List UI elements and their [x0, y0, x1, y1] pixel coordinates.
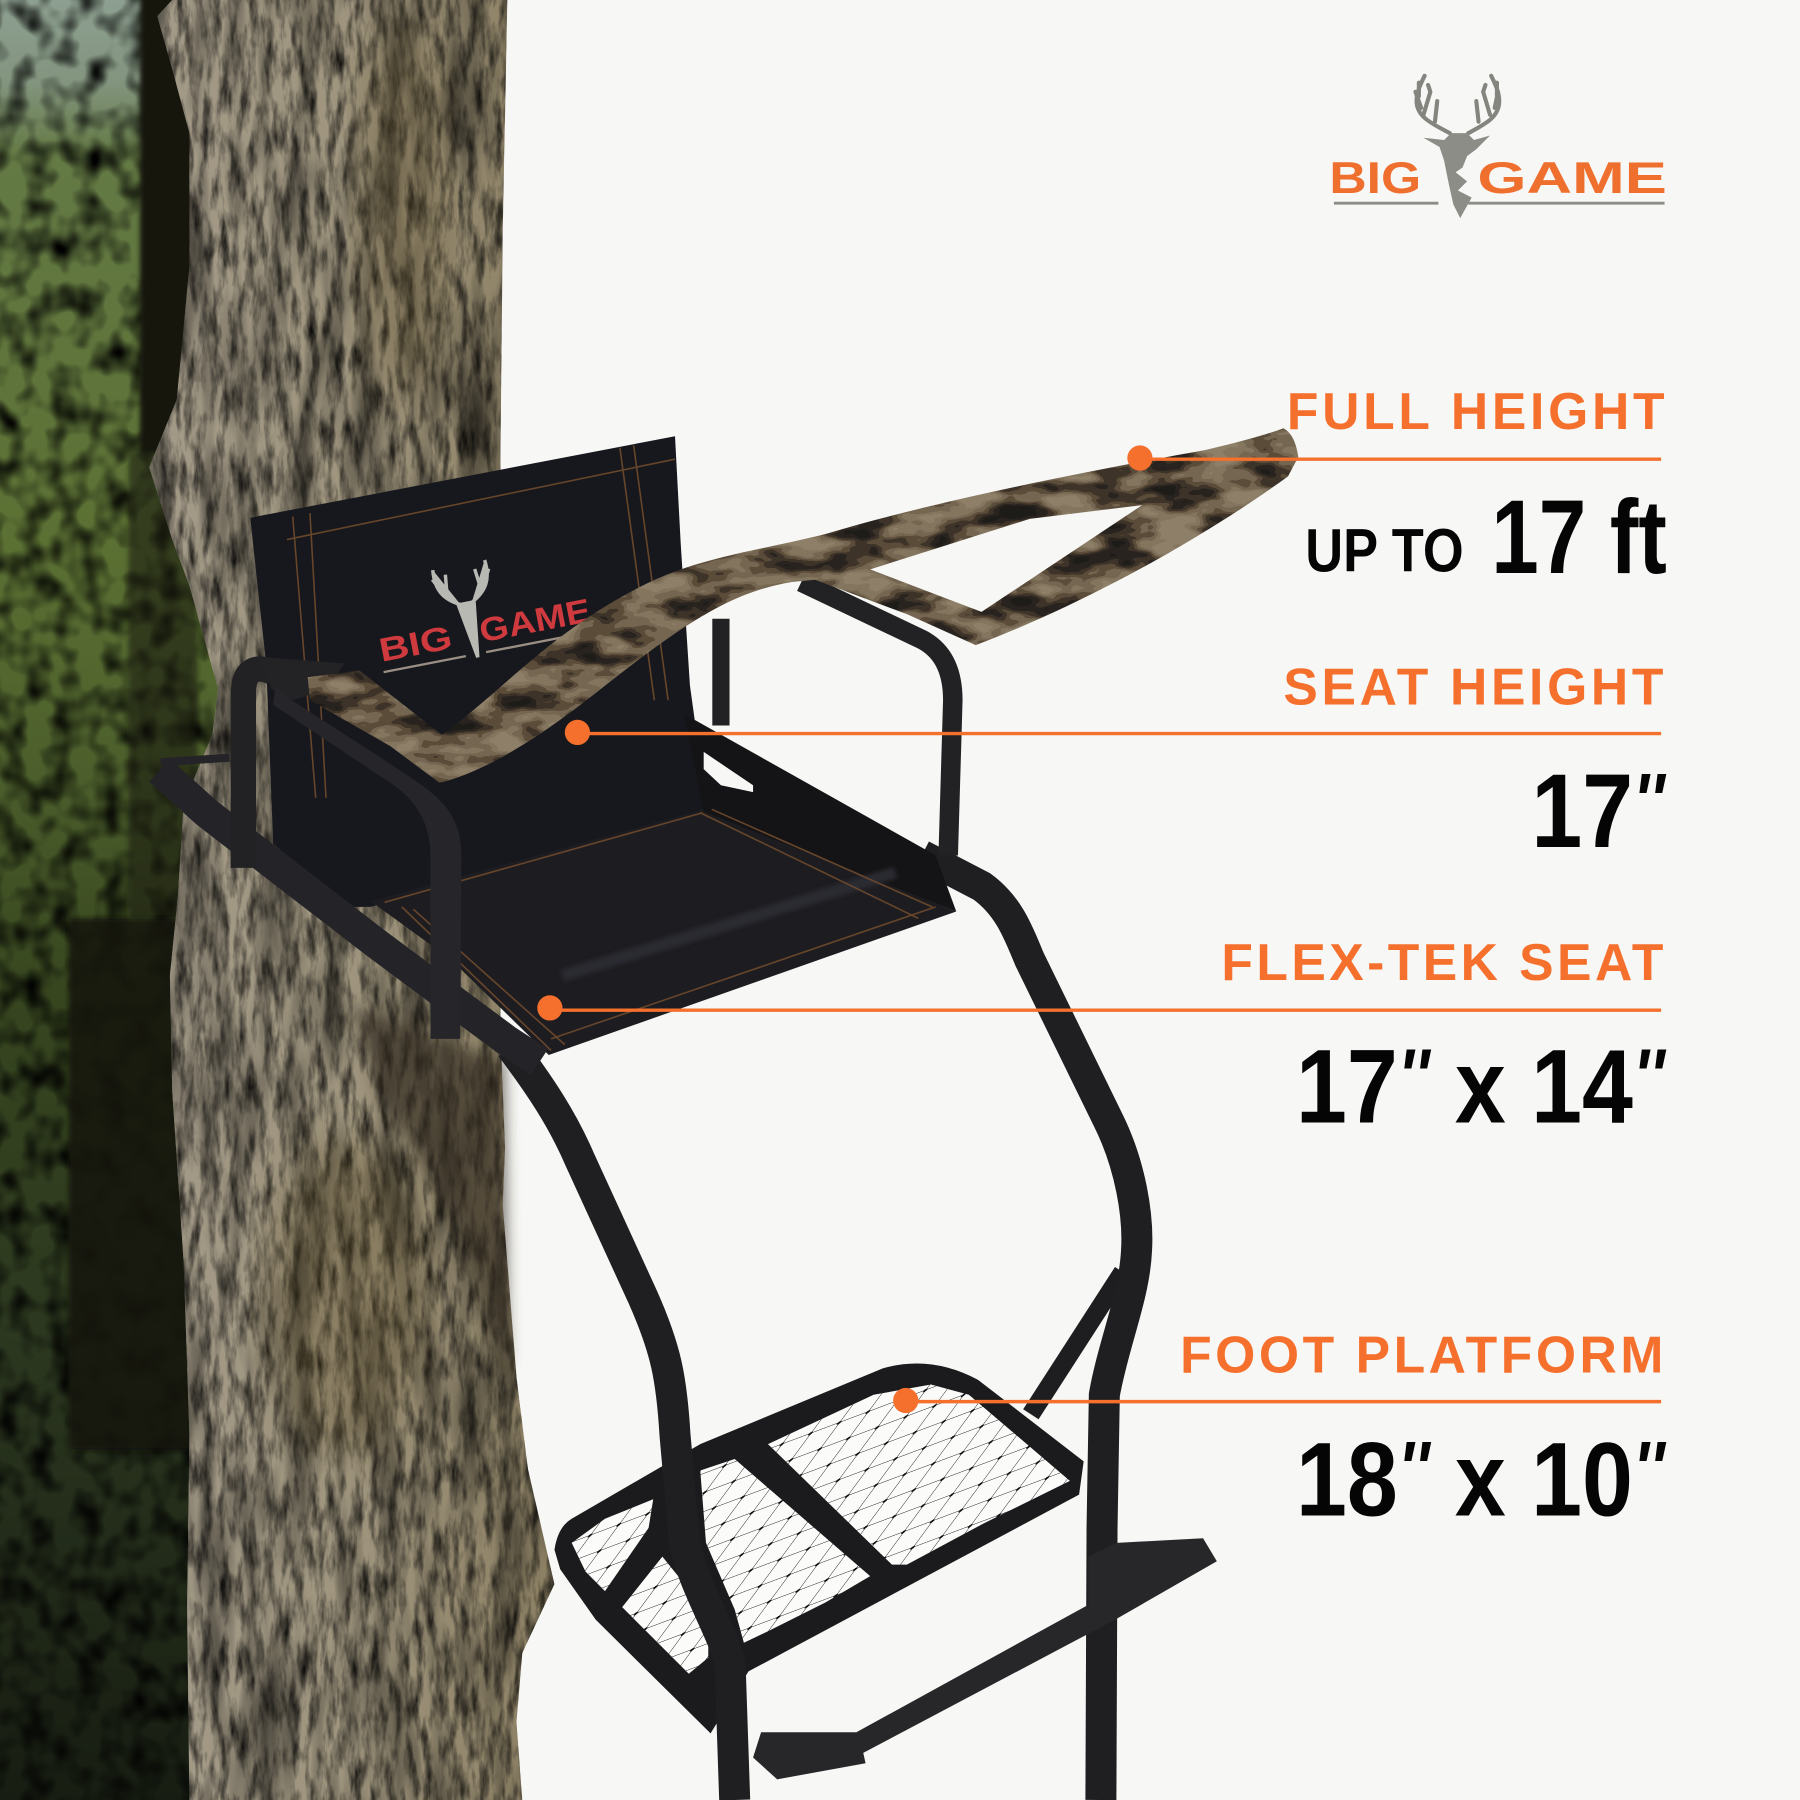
seat back logo — [366, 542, 595, 675]
value: '' — [1633, 1427, 1667, 1512]
value: 17 — [1531, 753, 1648, 870]
seat logo underline — [384, 632, 592, 672]
logo wordmark: GAME: GAME — [1477, 153, 1667, 203]
heading: FLEX-TEK SEAT — [1221, 933, 1663, 991]
seat side panel — [684, 714, 956, 911]
value: 17 — [1296, 1029, 1412, 1146]
value: '' — [1633, 759, 1667, 844]
spec: full height — [1127, 382, 1667, 596]
seat back fabric — [250, 436, 704, 907]
arm rest front rail and post — [273, 684, 461, 1039]
heading: SEAT HEIGHT — [1283, 657, 1663, 715]
callout line and dot — [565, 720, 1661, 745]
seat highlight — [562, 872, 895, 976]
value: 18 — [1296, 1421, 1412, 1538]
seat hand hole — [704, 752, 753, 792]
value: '' — [1398, 1034, 1432, 1119]
seat logo antlers — [431, 560, 505, 663]
heading: FULL HEIGHT — [1287, 382, 1665, 440]
tree trunk — [149, 0, 554, 1800]
value: x 14 — [1429, 1029, 1633, 1146]
callout line and dot — [893, 1388, 1661, 1413]
ladder stand — [160, 428, 1298, 1800]
icon: deer antlers — [1415, 76, 1499, 133]
forest background — [0, 0, 218, 1800]
value: '' — [1633, 1034, 1667, 1119]
value: '' — [1398, 1427, 1432, 1512]
callout line and dot — [537, 995, 1661, 1021]
seat logo GAME: GAME — [476, 593, 594, 650]
seat base fabric — [371, 809, 956, 1055]
foot platform mesh — [572, 1384, 1070, 1674]
ladder rails — [511, 855, 1137, 1800]
callout line and dot — [1127, 445, 1661, 471]
foot rest bar — [753, 1538, 1217, 1779]
icon: deer head — [1423, 133, 1490, 218]
logo underline — [1334, 202, 1665, 204]
heading: FOOT PLATFORM — [1180, 1325, 1663, 1383]
seat support beam — [160, 758, 540, 1062]
spec: flex-tek seat — [537, 933, 1667, 1146]
stitching — [287, 445, 936, 1050]
arm rest plate — [259, 657, 344, 700]
camo hand rail — [308, 428, 1298, 783]
arm rest back posts — [243, 582, 953, 868]
logo wordmark: BIG: BIG — [1329, 153, 1421, 203]
spec: seat height — [565, 657, 1667, 870]
brand logo — [1329, 76, 1667, 218]
foot platform frame — [554, 1364, 1084, 1733]
value: x 10 — [1429, 1421, 1633, 1538]
value: 17 ft — [1491, 479, 1667, 596]
seat logo BIG: BIG — [376, 619, 455, 670]
spec: foot platform — [893, 1325, 1667, 1538]
ladder brace — [1031, 1272, 1123, 1414]
value prefix: UP TO — [1305, 517, 1464, 585]
